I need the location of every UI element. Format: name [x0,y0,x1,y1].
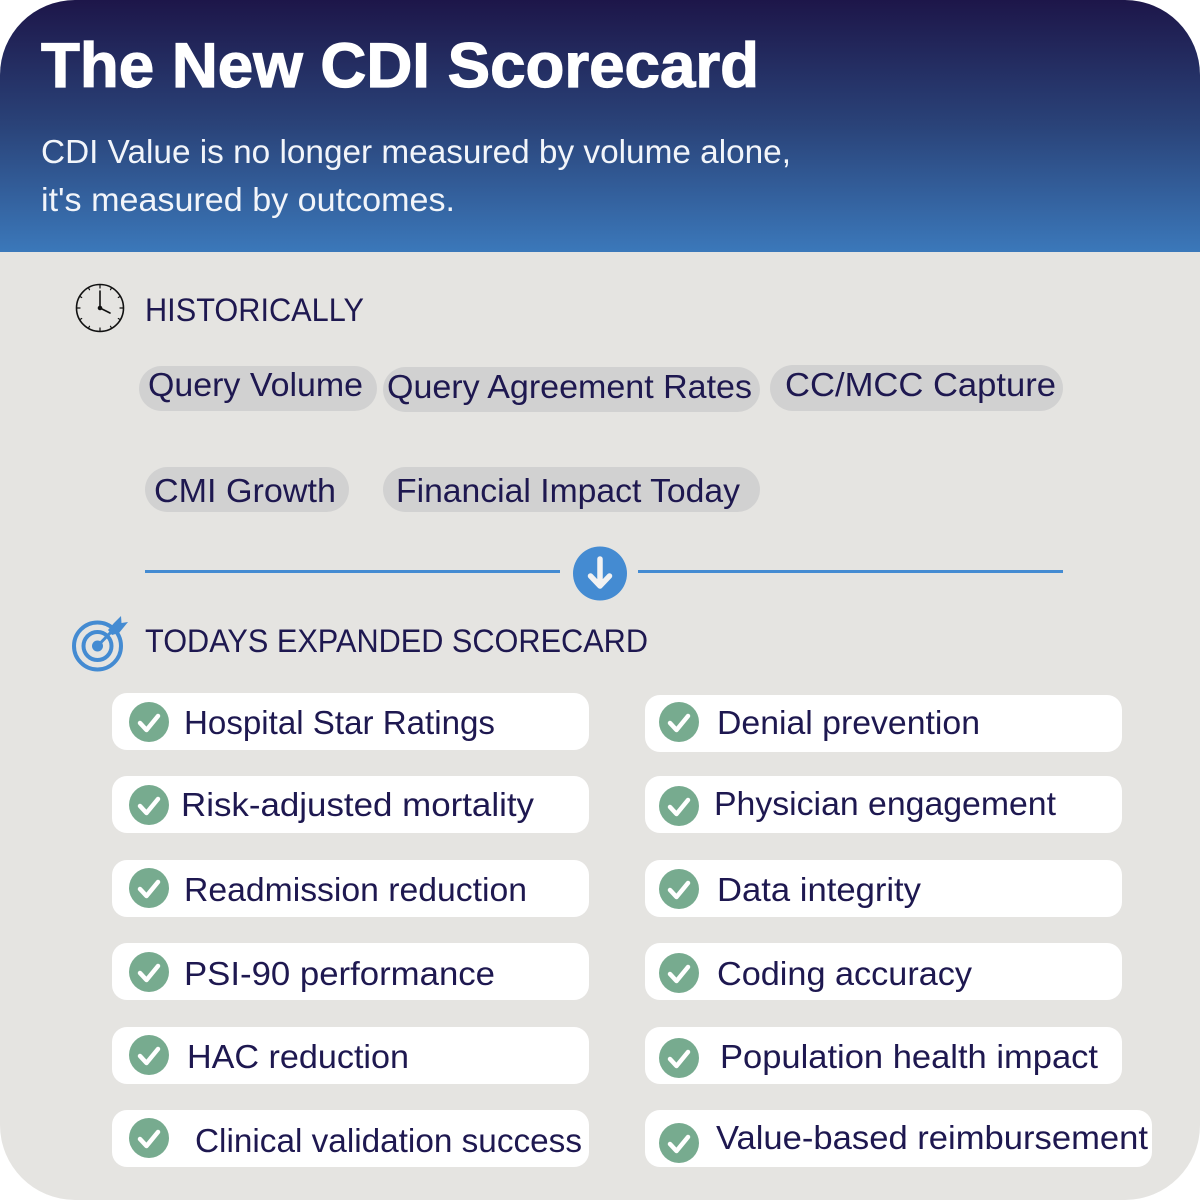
divider right [638,570,1063,573]
item: Value-based reimbursement: Value-based reimbursement [716,1119,1148,1156]
item: Denial prevention: Denial prevention [717,704,980,741]
subtitle [41,133,791,218]
item: Physician engagement [645,776,1122,833]
item: Data integrity: Data integrity [717,871,922,908]
chip: Query Volume: Query Volume [148,366,363,403]
item: HAC reduction [112,1027,589,1084]
icon: target [74,616,128,670]
item: Physician engagement: Physician engagement [714,785,1056,822]
subtitle: CDI Value is no longer measured by volume alone, [41,133,791,170]
item: Clinical validation success: Clinical validation success [195,1122,582,1159]
subtitle: it's measured by outcomes. [41,181,455,218]
item: Coding accuracy: Coding accuracy [717,955,973,992]
item: Risk-adjusted mortality: Risk-adjusted mortality [181,786,535,823]
item: Data integrity [645,860,1122,917]
panel: body background [0,252,1200,1200]
chip: CMI Growth: CMI Growth [154,472,336,509]
chip: Financial Impact Today: Financial Impact Today [396,472,741,509]
item: Denial prevention [645,695,1122,752]
item: Hospital Star Ratings [112,693,589,750]
icon: down arrow [573,546,627,600]
item: Population health impact: Population health impact [720,1038,1098,1075]
item: Coding accuracy [645,943,1122,1000]
item: HAC reduction: HAC reduction [187,1038,409,1075]
item: Readmission reduction: Readmission reduction [184,871,527,908]
item: Value-based reimbursement [645,1110,1152,1167]
header band [0,0,1200,252]
chip: Query Agreement Rates: Query Agreement Rates [387,368,752,405]
item: Clinical validation success [112,1110,589,1167]
divider left [145,570,560,573]
item: Hospital Star Ratings: Hospital Star Ratings [184,704,495,741]
chip: CC/MCC Capture: CC/MCC Capture [785,366,1056,403]
item: Risk-adjusted mortality [112,776,589,833]
icon: clock [76,284,124,332]
title: The New CDI Scorecard [41,31,759,101]
item: Population health impact [645,1027,1122,1084]
heading: historically: HISTORICALLY [145,292,364,328]
heading: todays expanded scorecard: TODAYS EXPANDED SCORECARD [145,623,648,659]
item: Readmission reduction [112,860,589,917]
item: PSI-90 performance: PSI-90 performance [184,955,495,992]
item: PSI-90 performance [112,943,589,1000]
